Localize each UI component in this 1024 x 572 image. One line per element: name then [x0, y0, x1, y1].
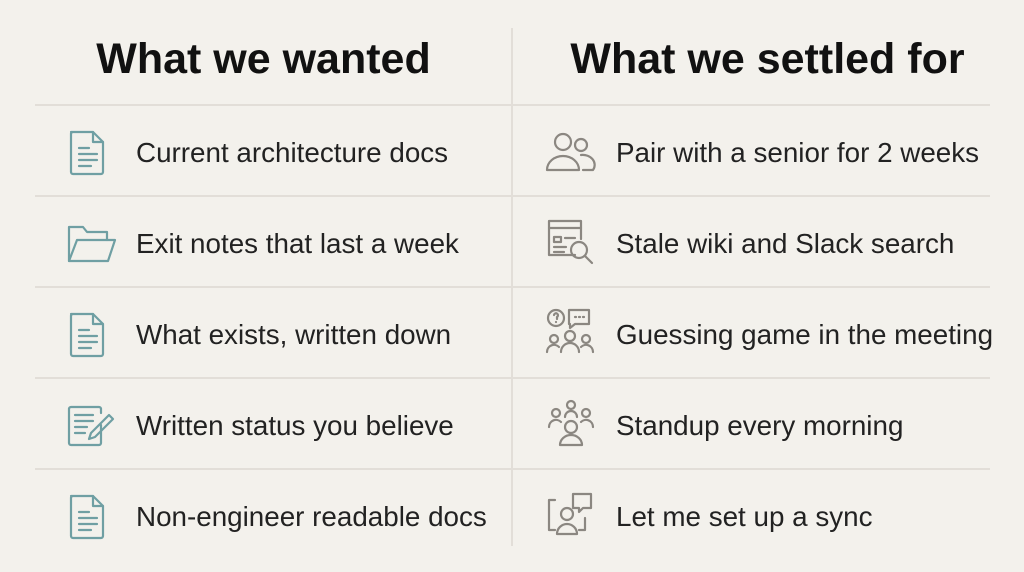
row: What exists: What exists, written down [136, 319, 451, 350]
row: Stale wiki [548, 220, 954, 264]
title: right column: What we settled for [570, 35, 965, 83]
row: Let me set up a sync: Let me set up a sync [616, 501, 872, 532]
row: Pair with senior [546, 132, 979, 172]
row: Stale wiki: Stale wiki and Slack search [616, 228, 954, 259]
row: Standup: Standup every morning [616, 410, 903, 441]
icon: browser search [548, 220, 594, 264]
icon: two people [546, 132, 596, 172]
row: Written status [68, 406, 454, 446]
row: Non-engineer docs [70, 494, 487, 540]
row: Guessing game [546, 308, 993, 354]
icon: document [70, 494, 104, 540]
icon: group [548, 400, 594, 446]
row: Non-engineer docs: Non-engineer readable docs [136, 501, 487, 532]
row: Exit notes [68, 226, 459, 262]
icon: video call [548, 492, 592, 536]
icon: document [70, 312, 104, 358]
row: What exists [70, 312, 451, 358]
icon: document with pencil [68, 406, 114, 446]
row: Guessing game: Guessing game in the meeting [616, 319, 993, 350]
row: Current architecture docs: Current architecture docs [136, 137, 448, 168]
row: Pair with senior: Pair with a senior for 2 weeks [616, 137, 979, 168]
row: Let me set up a sync [548, 492, 872, 536]
row: Current architecture docs [70, 130, 448, 176]
title: left column: What we wanted [96, 35, 431, 83]
icon: folder [68, 226, 116, 262]
icon: document [70, 130, 104, 176]
icon: people with speech bubbles [546, 308, 594, 354]
row: Exit notes: Exit notes that last a week [136, 228, 459, 259]
row: Standup [548, 400, 903, 446]
row: Written status: Written status you believe [136, 410, 454, 441]
